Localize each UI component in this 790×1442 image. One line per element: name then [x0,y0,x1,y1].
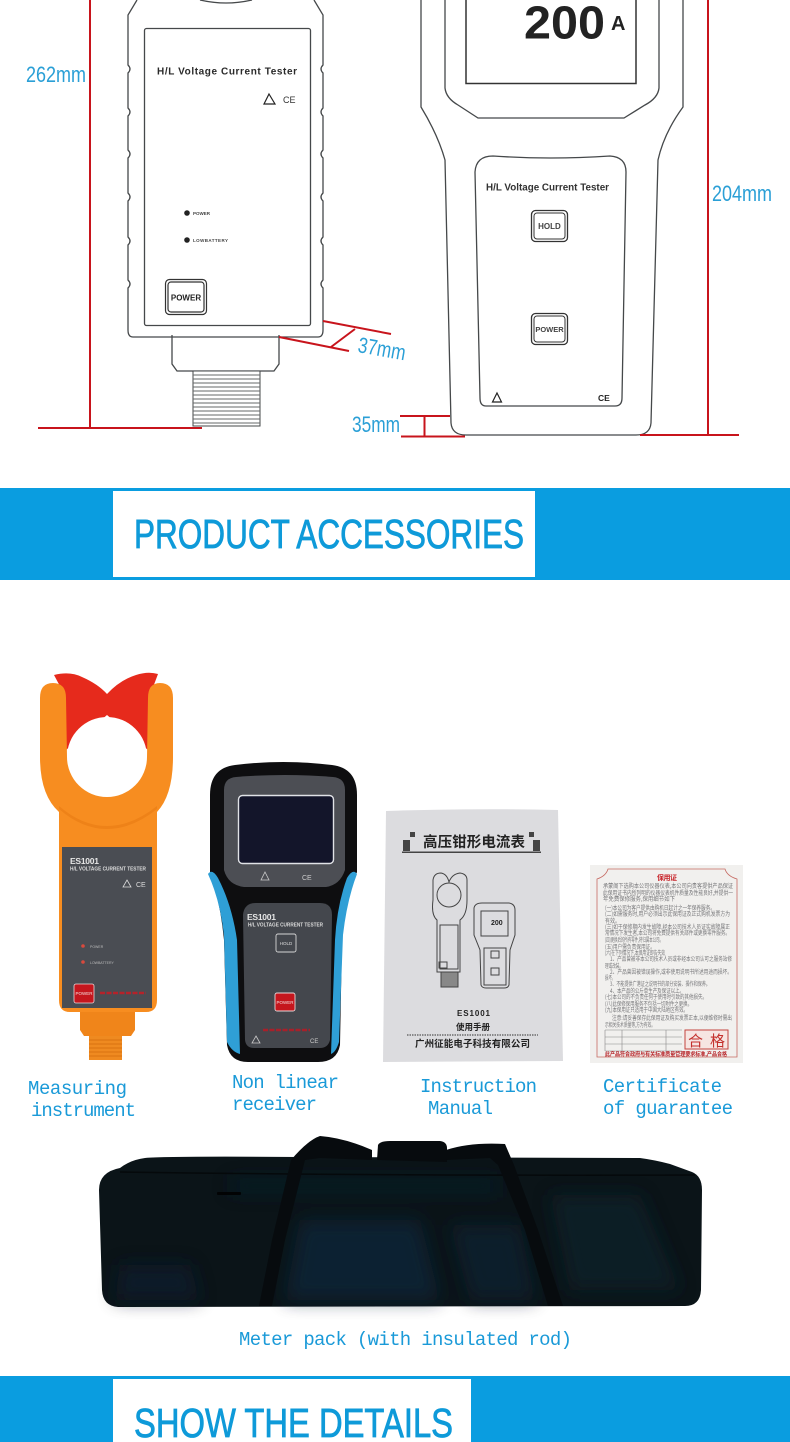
label: measuring instrument: instrument [31,1100,136,1122]
clamp meter outline [128,0,323,337]
receiver blue grips [208,872,357,1054]
clamp red marking [100,992,146,994]
manual publisher: 广州征能电子科技有限公司 [415,1036,530,1050]
receiver outline [421,0,683,435]
certificate body text: (九)本保用证只适用于中国大陆地区有效。 [605,1005,688,1014]
receiver title: H/L Voltage Current Tester [486,182,609,194]
receiver power button: POWER [276,1000,294,1005]
certificate body text: 示相关技术质量等,方为有效。 [605,1020,655,1029]
certificate body text [603,881,733,1029]
label: non linear receiver: receiver [232,1094,317,1116]
height dimension 262mm: 262mm [26,62,86,87]
manual mini receiver drawing [474,903,515,988]
certificate body text: 常情况下发生者,本公司将免费提供有关部件或更换零件服务。 [605,928,730,937]
banner: product accessories: PRODUCT ACCESSORIES [134,511,524,557]
manual mini clamp drawing [432,873,467,987]
receiver hold button [276,934,296,952]
manual model: ES1001 [457,1009,491,1018]
clamp indicator lights: POWER [90,945,104,949]
certificate card [590,865,743,1063]
certificate border [597,869,737,1057]
manual mini reading: 200 [491,920,503,927]
certificate title: 保用证 [657,873,677,883]
indicator lights: POWER [193,211,211,216]
orange jaws [40,683,173,1012]
clamp meter neck [172,335,279,371]
bag body [99,1157,702,1307]
label: meter pack: Meter pack (with insulated rod) [239,1329,572,1351]
clamp meter title: H/L Voltage Current Tester [157,66,297,78]
certificate body text: 此保用证书内所列明的仪器仪表机件质量及性能良好,并提供一 [603,888,733,897]
line drawing: receiver dimensions [352,0,772,437]
display reading 200 A: A [611,13,625,35]
height dimension 204mm [640,0,772,435]
certificate body text: (二)如需服务时,用户必须出示此保用证及正式购机发票方为 [605,909,730,918]
label: instruction manual: Instruction [420,1076,537,1098]
manual sheet [383,809,563,1062]
receiver lower grey panel [243,903,332,1048]
certificate body text: 承蒙阁下选购本公司仪器仪表,本公司向贵客提供产品保证 [603,881,733,890]
clamp power button: POWER [75,991,93,996]
hold button: HOLD [538,222,561,231]
certificate body text: (三)如于保修期内发生故障,经本公司技术人员证实故障属正 [605,922,730,931]
certificate red footer: 此产品符合政府与有关标准质量管理要求标准,产品合格 [605,1050,727,1058]
certificate body text: 2、产品曾因被错误操作,或非使用说明书所述用途而损坏。 [610,967,732,976]
width dimension 37mm [279,321,408,365]
manual title ornaments [402,832,541,853]
label: certificate of guarantee: Certificate [603,1076,722,1098]
certificate body text: 4、本产品的公斤单生产及保证以上。 [610,986,684,995]
red jaw tips [54,673,158,750]
qualified stamp: 合格 [688,1030,725,1051]
clamp marks: CE [136,882,146,889]
certificate body text: (八)此保修保用服务不包括一切附件之更换。 [605,999,692,1008]
indicator lights: LOWBATTERY [193,238,228,243]
label: certificate of guarantee: of guarantee [603,1098,733,1120]
label: non linear receiver [232,1072,339,1116]
clamp meter jaw arc [200,0,252,3]
base dimension 35mm [352,412,465,437]
certificate body text: 1、产品曾被非本公司技术人员或非经本公司认可之服务站修 [610,954,732,963]
power button: POWER [171,294,201,302]
certificate body text: (七)本公司的不负责任何于使用时引致的其他损失。 [605,992,707,1001]
manual dotted divider [407,1034,538,1036]
receiver lower marks: CE [310,1039,318,1045]
warning and CE marks [264,94,296,105]
manual title: 高压钳形电流表 [423,831,526,852]
clamp indicator lights: LOWBATTERY [90,961,114,965]
certificate body text: 年免费保修服务,保用细节如下 [603,894,675,903]
receiver subtitle: H/L VOLTAGE CURRENT TESTER [248,922,323,928]
banner: show the details [0,1376,790,1442]
hold button [532,210,568,242]
product: clamp measuring instrument [40,673,173,1060]
certificate body text: 理或改装。 [605,961,623,970]
receiver power button [275,993,295,1011]
receiver upper marks: CE [302,875,312,882]
certificate body text: (四)更换后的所有零件,将归属本公司。 [605,935,663,944]
indicator lights [184,210,228,243]
bag right strap [446,1144,563,1306]
clamp marks [123,880,146,889]
label: certificate of guarantee [603,1076,733,1120]
power button [166,280,206,314]
label: measuring instrument: Measuring [28,1078,127,1100]
receiver upper grey panel [224,775,345,887]
receiver screen [466,0,636,84]
warning and CE marks: CE [283,95,296,105]
certificate body text: (一)本公司为客户提供由购机日起计之一年保养服务。 [605,903,715,912]
label: measuring instrument [28,1078,136,1122]
bag fabric highlights [115,1180,680,1300]
clamp meter face panel [144,28,310,326]
banner: product accessories [0,488,790,580]
warning and CE marks [492,393,610,403]
receiver screen [238,796,334,864]
certificate body text: 3、不能提供广港证之说明书的部分安装、操作和保养。 [610,979,710,988]
label: instruction manual: Manual [428,1098,493,1120]
base dimension 35mm: 35mm [352,412,400,437]
jaw shading [59,806,157,829]
label: non linear receiver: Non linear [232,1072,339,1094]
certificate body text: 损坏。 [605,973,615,982]
receiver hold button: HOLD [280,941,293,946]
clamp power button [74,984,94,1003]
height dimension 262mm [26,0,202,428]
bag top handle [377,1141,447,1162]
certificate body text: 有效。 [605,916,620,925]
bag left strap [259,1136,372,1306]
bag zipper seam [120,1172,695,1175]
bag side pocket zip [217,1192,241,1195]
receiver screen bezel [445,0,659,118]
clamp grey panel [62,847,152,1008]
width dimension 37mm: 37mm [356,332,408,365]
receiver lower marks [252,1036,318,1045]
label: instruction manual [420,1076,537,1120]
certificate body text: (五)用户需负责保用证。 [605,942,655,951]
certificate body text: (六)在下列情况下,本保用证即告失效 [605,948,665,957]
receiver upper marks [261,872,312,882]
product: non linear receiver [208,762,357,1062]
power button: POWER [535,325,564,334]
warning and CE marks: CE [598,393,610,403]
receiver key panel [475,156,626,406]
clamp meter threads [193,371,260,426]
product: meter pack bag [99,1136,702,1307]
product: certificate of guarantee [590,865,743,1063]
certificate body text: 注意:请妥善保存此保用证及购买发票正本,以便维修时需出 [612,1013,732,1022]
manual subtitle: 使用手册 [456,1021,491,1033]
jaw opening [67,717,147,797]
clamp model name: ES1001 [70,856,99,866]
line drawing: clamp meter dimensions [26,0,408,428]
certificate form table [605,1030,682,1051]
neck and threads [80,1012,135,1060]
clamp subtitle: H/L VOLTAGE CURRENT TESTER [70,866,146,872]
receiver red marking [263,1029,310,1031]
receiver black body [210,762,357,1062]
receiver model name: ES1001 [247,912,276,922]
clamp indicator lights [81,944,114,965]
height dimension 204mm: 204mm [712,181,772,206]
product: instruction manual [383,809,563,1062]
power button [532,314,568,344]
